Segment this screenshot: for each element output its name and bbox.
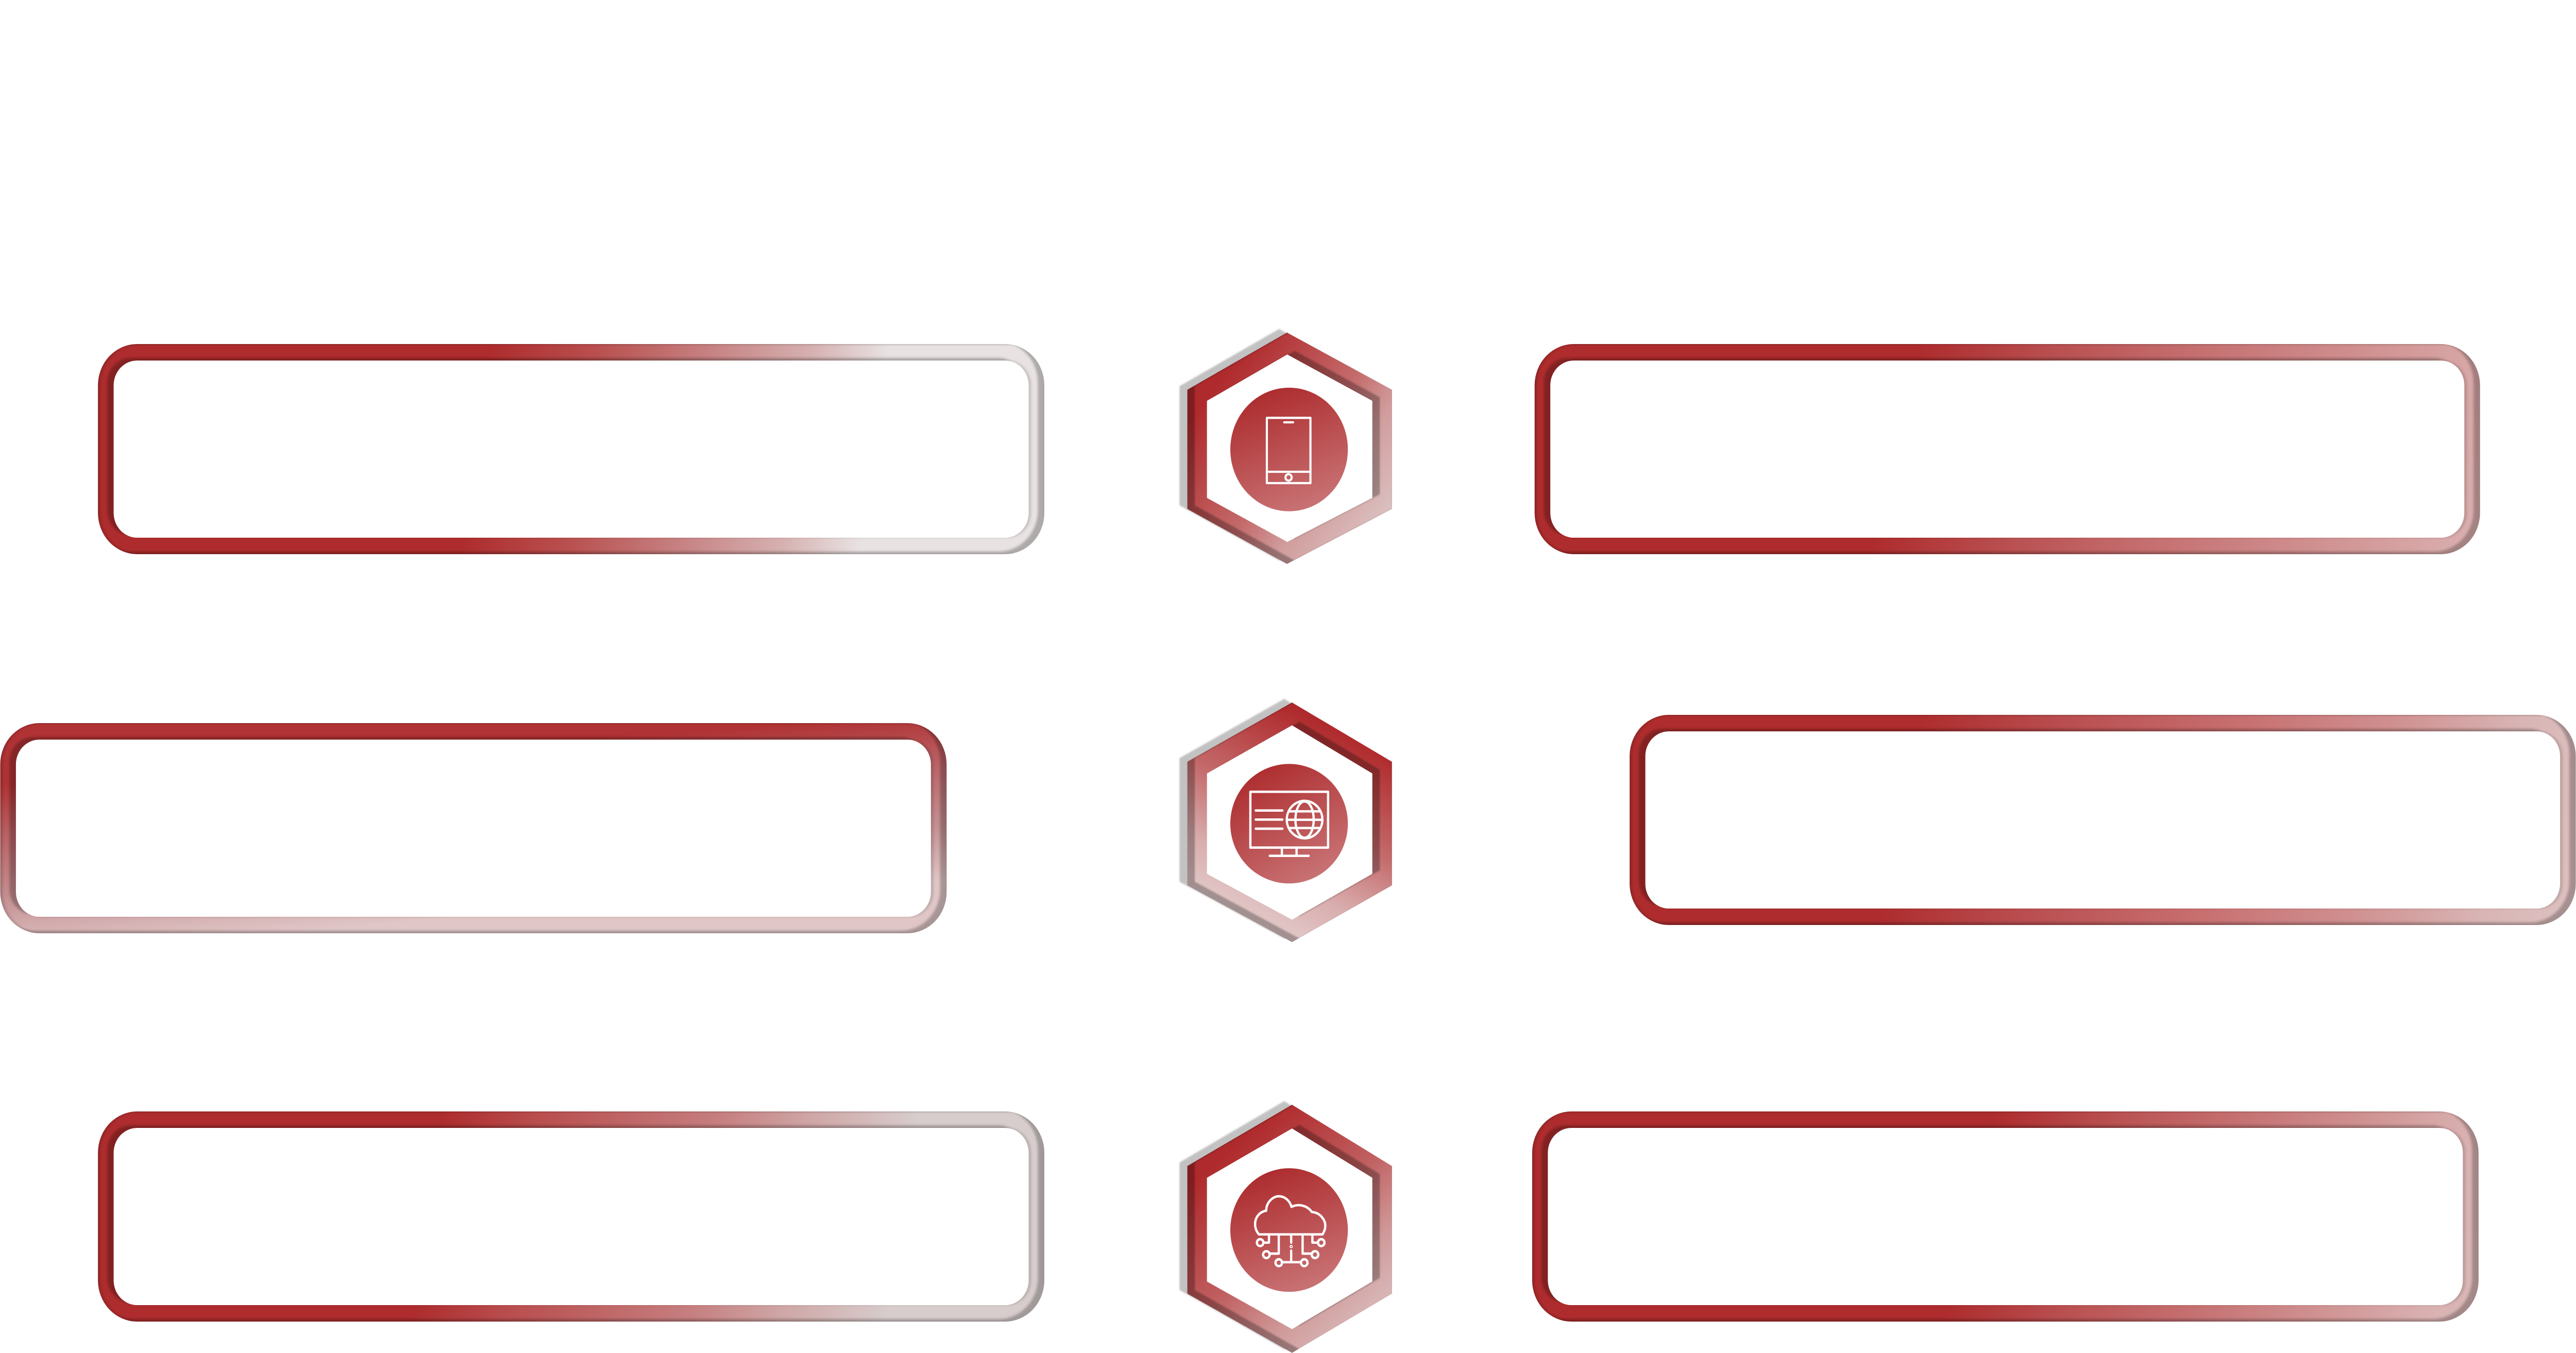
hexagon shadow bbox=[1179, 699, 1384, 938]
hexagon opening bbox=[1207, 1128, 1372, 1329]
icon: tablet bbox=[1267, 418, 1311, 483]
icon disc bbox=[1230, 388, 1348, 511]
hexagon shadow bbox=[1179, 329, 1384, 560]
panel: middle right frame bbox=[1630, 715, 2576, 925]
icon: monitor with globe bbox=[1250, 792, 1328, 856]
hexagon ring bbox=[1188, 333, 1392, 564]
panel: top left frame bbox=[98, 344, 1044, 554]
panel: bottom right frame bbox=[1532, 1111, 2479, 1322]
panel: top right frame bbox=[1535, 344, 2480, 554]
panel: middle left frame bbox=[0, 723, 946, 933]
icon: cloud network bbox=[1255, 1196, 1325, 1266]
hexagon opening bbox=[1207, 725, 1372, 920]
hexagon badge: cloud network bbox=[1179, 1101, 1392, 1353]
hexagon ring bbox=[1188, 1105, 1392, 1353]
panel: bottom left frame bbox=[98, 1111, 1044, 1322]
hexagon shadow bbox=[1179, 1101, 1384, 1349]
hexagon badge: tablet bbox=[1179, 329, 1392, 564]
hexagon badge: monitor with globe bbox=[1179, 699, 1392, 942]
icon disc bbox=[1230, 1168, 1348, 1292]
icon disc bbox=[1230, 764, 1348, 883]
hexagon ring bbox=[1188, 703, 1392, 942]
hexagon opening bbox=[1207, 354, 1372, 542]
